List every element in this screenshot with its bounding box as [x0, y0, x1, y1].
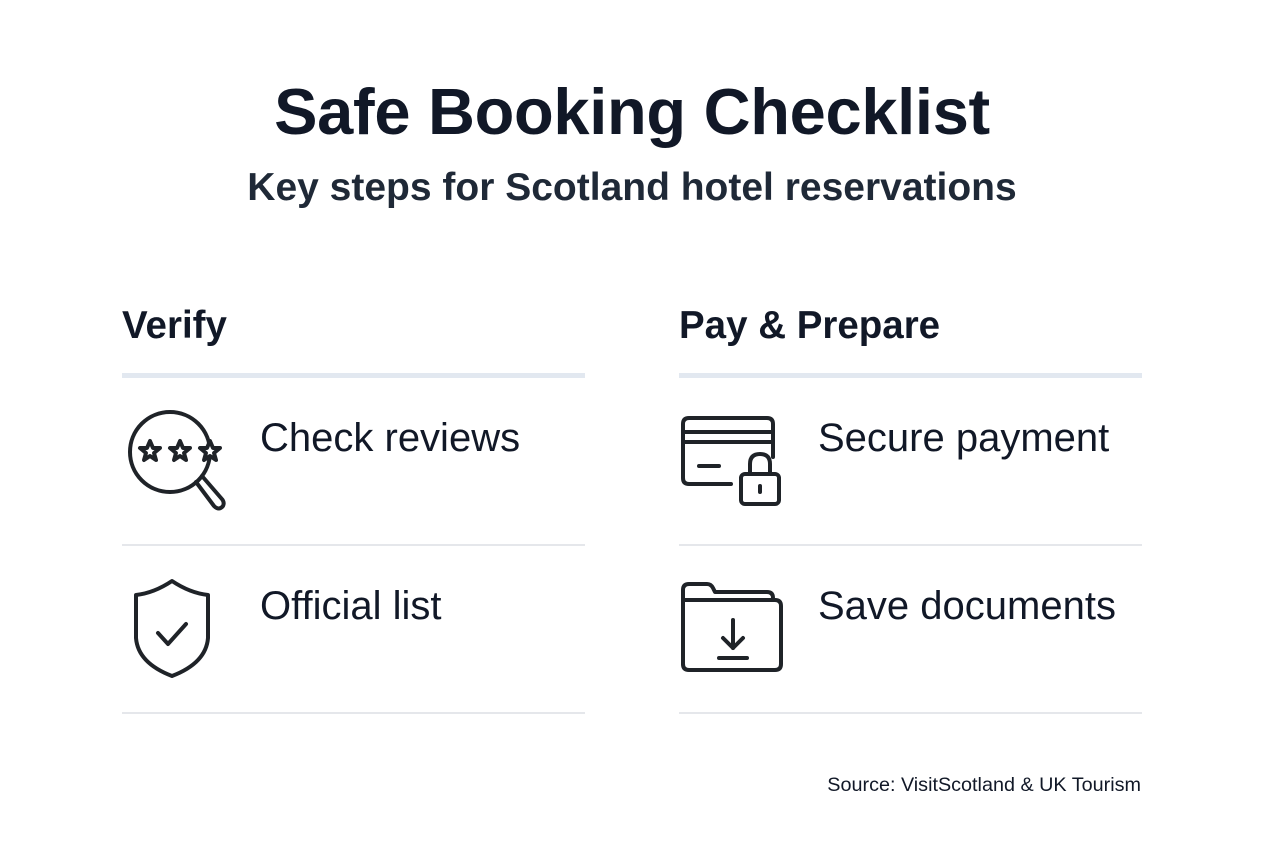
panel: pay & prepare [679, 304, 1142, 714]
icon: shield [134, 579, 210, 678]
icon: card with lock [681, 416, 781, 506]
heading: pay & prepare: Pay & Prepare [679, 304, 940, 347]
subtitle: Key steps for Scotland hotel reservations [247, 166, 1017, 209]
panel: verify [122, 304, 585, 714]
text: save documents: Save documents [818, 584, 1116, 628]
heading: verify: Verify [122, 304, 227, 347]
title: Safe Booking Checklist [274, 75, 990, 148]
text: official list: Official list [260, 584, 442, 628]
icon: folder download [681, 582, 783, 672]
text: secure payment: Secure payment [818, 416, 1109, 460]
source: Source: VisitScotland & UK Tourism [827, 774, 1141, 796]
text: check reviews: Check reviews [260, 416, 520, 460]
icon: magnifier stars [128, 410, 226, 510]
